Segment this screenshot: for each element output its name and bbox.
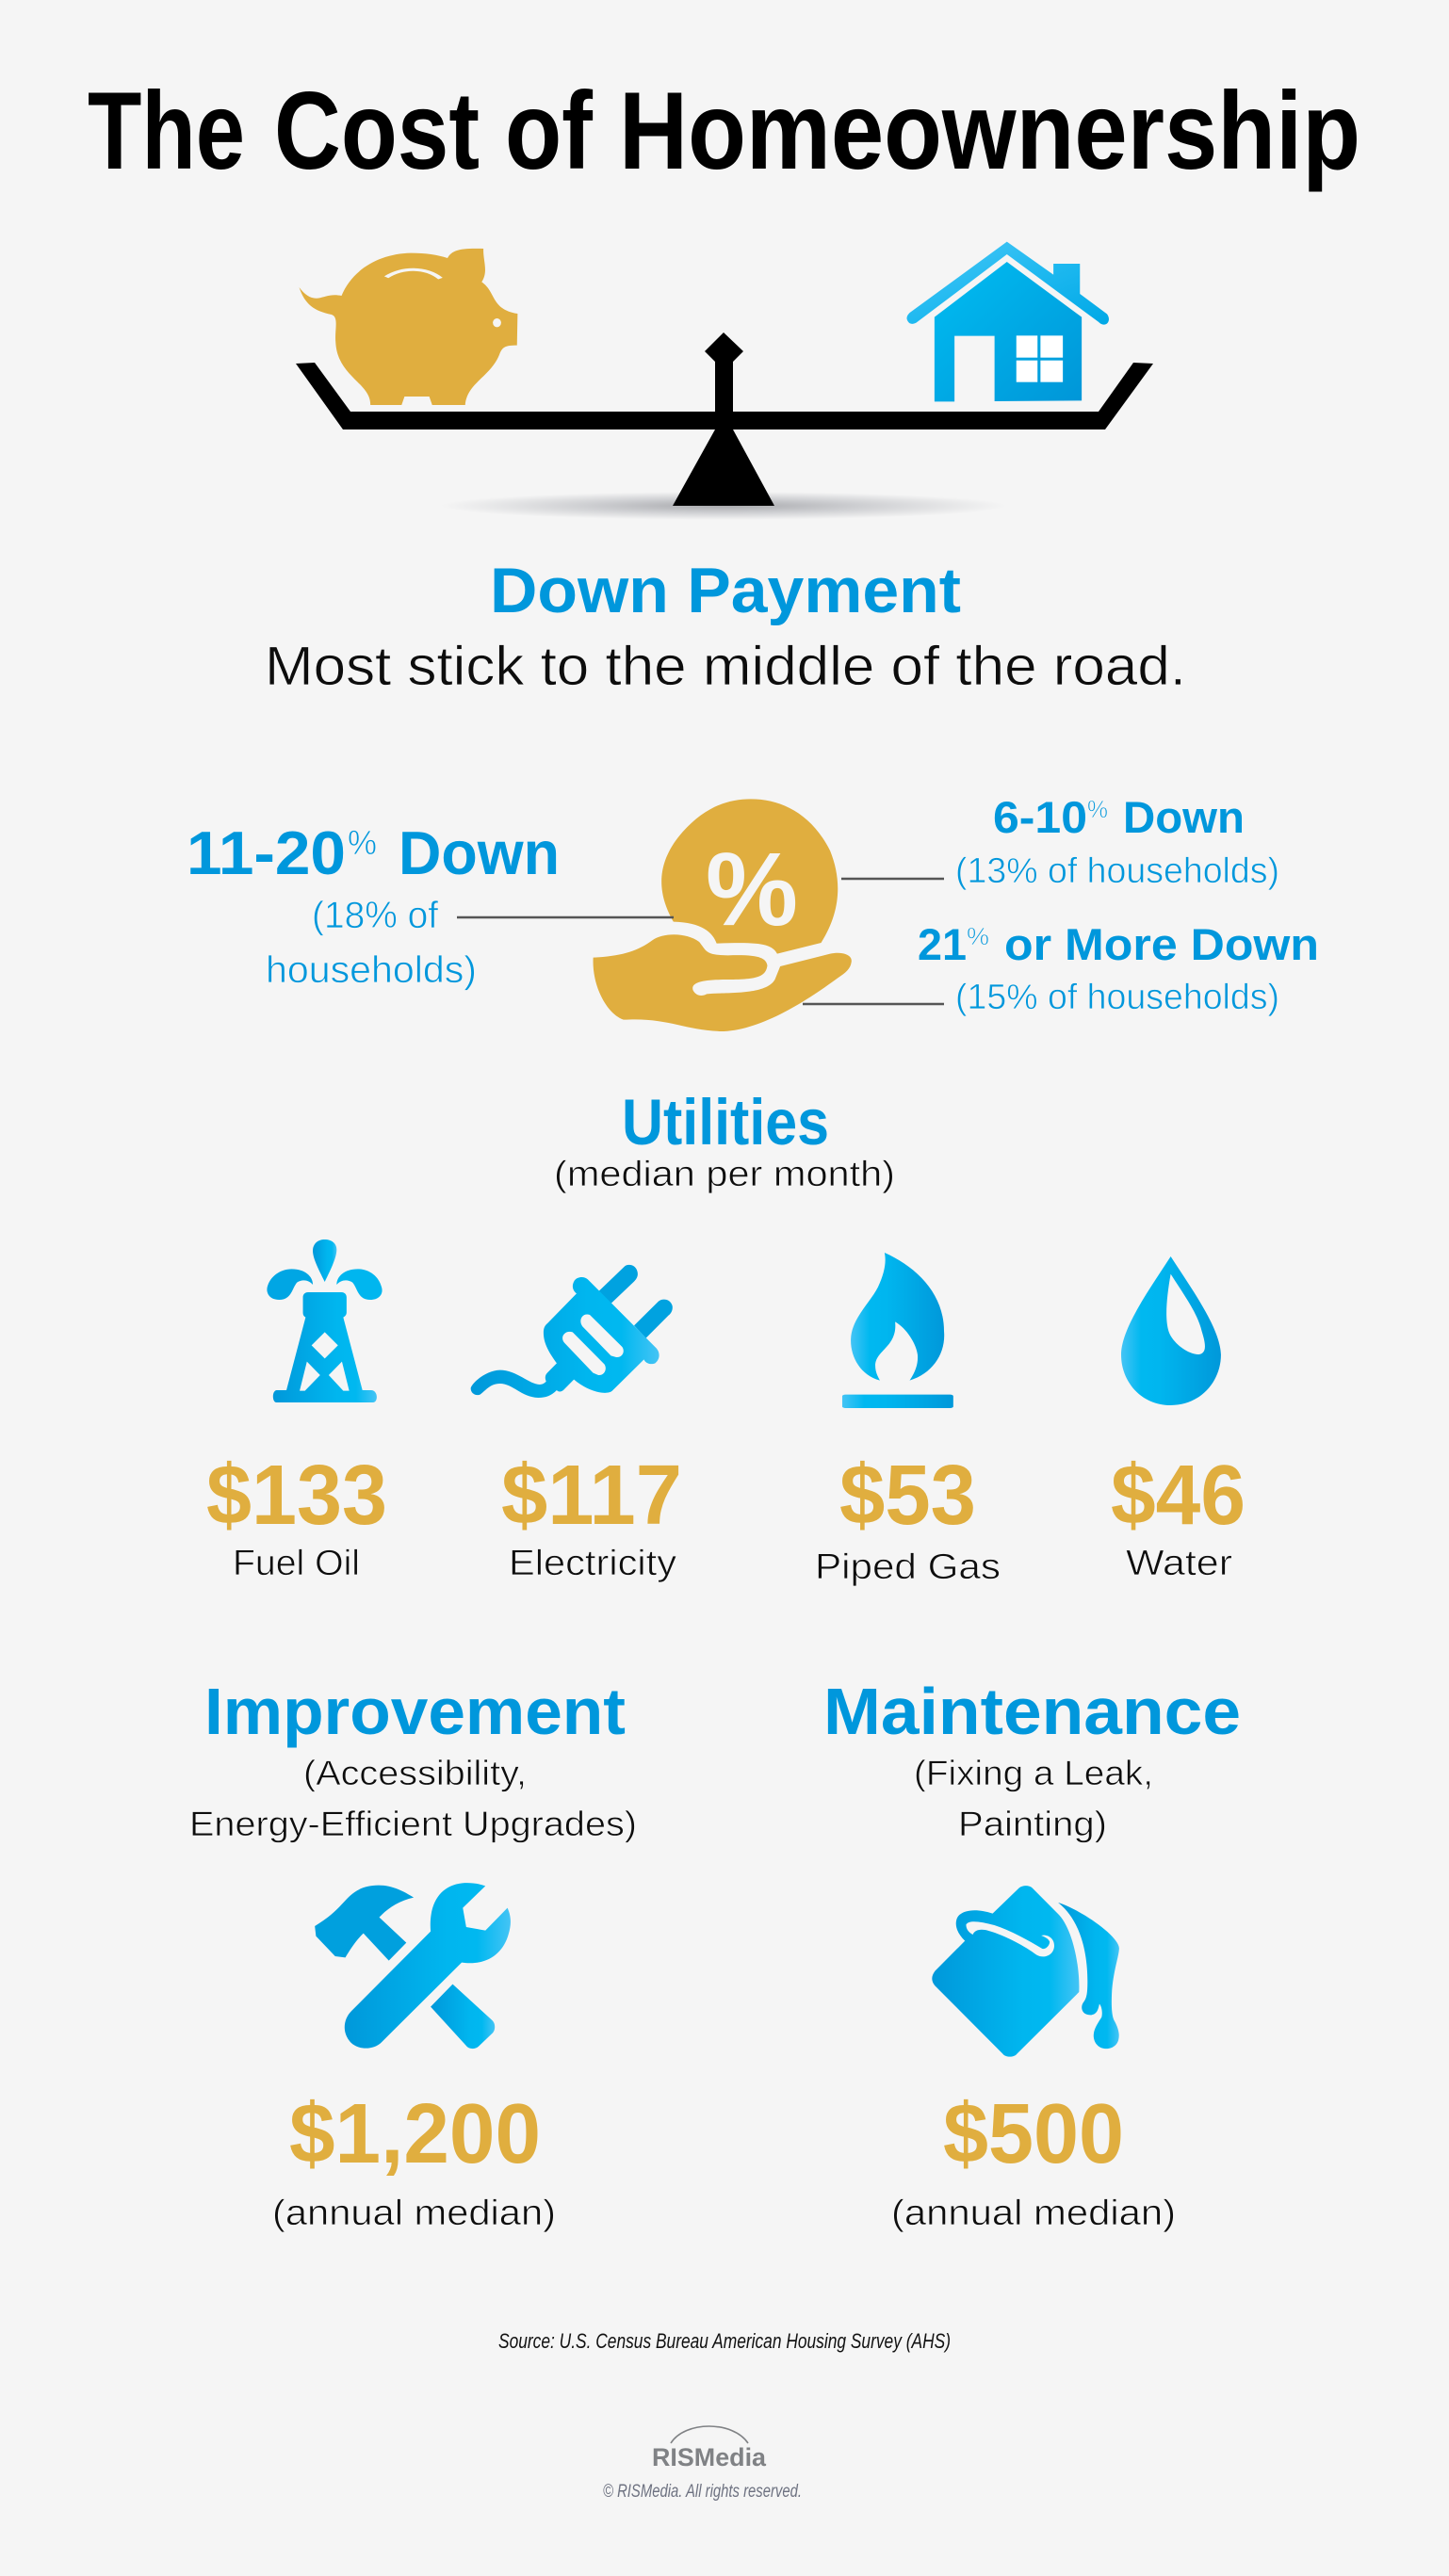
icon: house: [906, 242, 1109, 401]
icon: paint bucket: [932, 1886, 1119, 2057]
heading: down payment: Down Payment: [490, 555, 961, 626]
illustration: balance scale with piggy bank and house: [296, 242, 1153, 520]
callout: 11-20% down: (18% of: [312, 895, 439, 936]
icon: electric plug: [471, 1265, 673, 1398]
callout: 21% or more down: %: [967, 922, 989, 950]
caption: annual median: (annual median): [272, 2194, 556, 2233]
label: piped gas: Piped Gas: [815, 1547, 1001, 1587]
maintenance description: (Fixing a Leak,: [914, 1754, 1153, 1792]
heading: improvement: Improvement: [204, 1675, 626, 1748]
value: piped gas: $53: [839, 1449, 976, 1543]
panel: piped gas: [815, 1253, 1001, 1587]
callout: 21% or more down: 21: [918, 919, 967, 969]
callout: 6-10% down: 6-10: [993, 792, 1087, 842]
scale shadow: [441, 492, 1006, 520]
callout: 11-20% down: %: [348, 823, 377, 862]
title: Cost: [274, 69, 480, 192]
improvement description: [189, 1754, 637, 1843]
value: fuel oil: $133: [206, 1449, 387, 1543]
maintenance description: Painting): [958, 1805, 1107, 1843]
title: The: [88, 69, 245, 192]
leader lines: [457, 879, 944, 1004]
caption: annual median: (annual median): [891, 2194, 1176, 2233]
improvement description: (Accessibility,: [303, 1754, 527, 1792]
label: water: Water: [1126, 1544, 1232, 1583]
balance scale: [296, 332, 1153, 506]
panel: improvement: [189, 1675, 637, 2233]
subtitle: down payment: Most stick to the middle of the road.: [265, 636, 1186, 697]
logo: RISMedia: [652, 2426, 767, 2471]
source note: Source: U.S. Census Bureau American Housing Survey (AHS): [498, 2329, 951, 2353]
value: water: $46: [1111, 1449, 1245, 1543]
panel: fuel oil: [206, 1239, 387, 1583]
panel: maintenance: [823, 1675, 1241, 2233]
panel: water: [1111, 1256, 1245, 1583]
callout: 6-10% down: %: [1087, 795, 1108, 823]
callout: 21% or more down: or More Down: [1004, 919, 1319, 969]
icon: hammer and wrench: [315, 1883, 511, 2049]
icon: piggy bank: [300, 249, 517, 405]
callout: 21% or more down: (15% of households): [955, 978, 1279, 1017]
panel: electricity: [471, 1265, 682, 1583]
icon: oil derrick: [267, 1239, 383, 1402]
label: fuel oil: Fuel Oil: [233, 1544, 360, 1583]
logo: RISMedia: RISMedia: [652, 2443, 767, 2471]
callout: 11-20% down: 11-20: [187, 818, 346, 887]
copyright note: © RISMedia. All rights reserved.: [603, 2482, 802, 2502]
callout: 21% or more down: [918, 919, 1319, 1017]
heading: utilities: Utilities: [622, 1086, 829, 1158]
callout: 6-10% down: Down: [1123, 792, 1245, 842]
callout: 11-20% down: [187, 818, 560, 991]
value: electricity: $117: [501, 1449, 682, 1543]
value: maintenance: $500: [943, 2087, 1124, 2181]
title: of: [505, 69, 594, 192]
percent sign on coin: %: [706, 832, 798, 948]
subheading: median per month: (median per month): [554, 1155, 895, 1194]
callout: 6-10% down: (13% of households): [955, 851, 1279, 891]
value: improvement: $1,200: [289, 2087, 541, 2181]
maintenance description: [914, 1754, 1153, 1843]
label: electricity: Electricity: [509, 1544, 676, 1583]
improvement description: Energy-Efficient Upgrades): [189, 1805, 637, 1843]
icon: gas flame: [842, 1253, 953, 1408]
title: [88, 69, 1360, 192]
icon: water drop: [1121, 1256, 1221, 1405]
icon: hand holding percent coin: [594, 799, 852, 1031]
callout: 6-10% down: [955, 792, 1279, 891]
heading: maintenance: Maintenance: [823, 1675, 1241, 1748]
callout: 11-20% down: households): [266, 949, 477, 991]
callout: 11-20% down: Down: [399, 818, 560, 887]
